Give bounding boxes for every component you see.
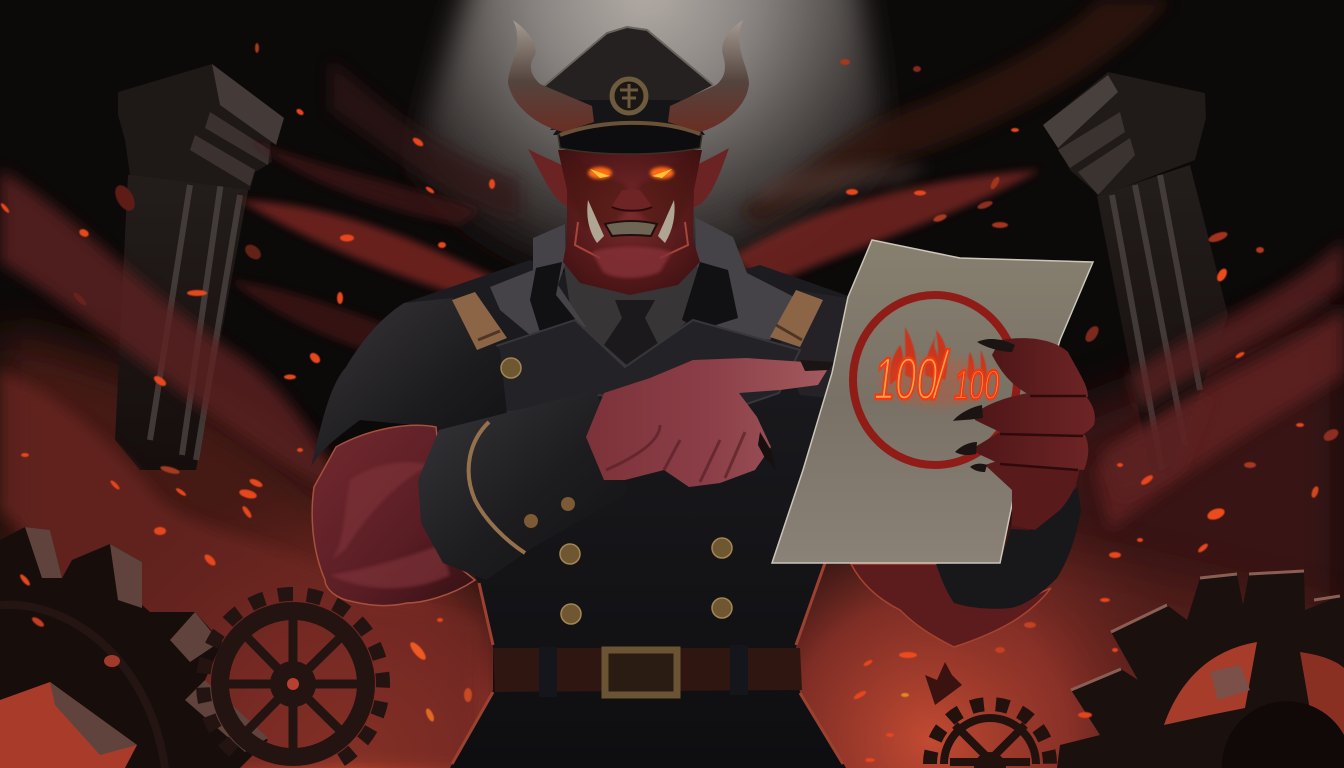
nose (612, 190, 652, 210)
right sleeve cuff (936, 485, 1081, 609)
gear: far left large (0, 527, 268, 768)
spotlight (368, 0, 915, 300)
red haze and floor glow (0, 270, 1344, 768)
gear: left small (203, 594, 383, 760)
holding hand (953, 338, 1095, 530)
right column (1043, 72, 1228, 475)
neck and face (558, 150, 702, 295)
red score circle (853, 295, 1017, 465)
collar lapels (490, 217, 800, 340)
right forearm behind paper (851, 564, 1051, 647)
gear: right large (1057, 571, 1344, 768)
arm bracer (418, 390, 628, 580)
chin (592, 247, 672, 278)
tusks (587, 200, 675, 243)
leather straps (452, 290, 823, 350)
pointing hand (586, 358, 835, 487)
paper (772, 240, 1093, 563)
belt and buckle (493, 645, 802, 697)
horns (508, 20, 749, 132)
score text: 100 (954, 362, 999, 409)
coat buttons (501, 358, 732, 624)
fingers (985, 460, 1080, 530)
right shoulder (779, 290, 860, 400)
coat body (404, 260, 860, 768)
gear: lower center right small (930, 704, 1050, 768)
left shoulder sleeve (311, 298, 507, 467)
score text: 100 (874, 346, 938, 412)
double-breasted chest flap (475, 320, 800, 420)
claws (953, 339, 1015, 472)
score glow (878, 357, 994, 407)
teeth (605, 221, 657, 236)
small broken gear silhouette (925, 662, 962, 705)
score text: / (931, 338, 950, 414)
officer cap (543, 27, 713, 154)
demon figure (311, 20, 1095, 768)
skirt red rim (452, 563, 843, 764)
flames on score (890, 327, 987, 385)
jaw rim light (575, 222, 688, 258)
brow and cheek shading (570, 160, 690, 228)
shirt and tie (563, 258, 700, 372)
wrist (1011, 470, 1077, 530)
ears (528, 148, 729, 208)
muscular left arm (312, 425, 475, 606)
left column (115, 64, 284, 470)
head (528, 148, 729, 295)
glowing eyes (588, 167, 674, 179)
